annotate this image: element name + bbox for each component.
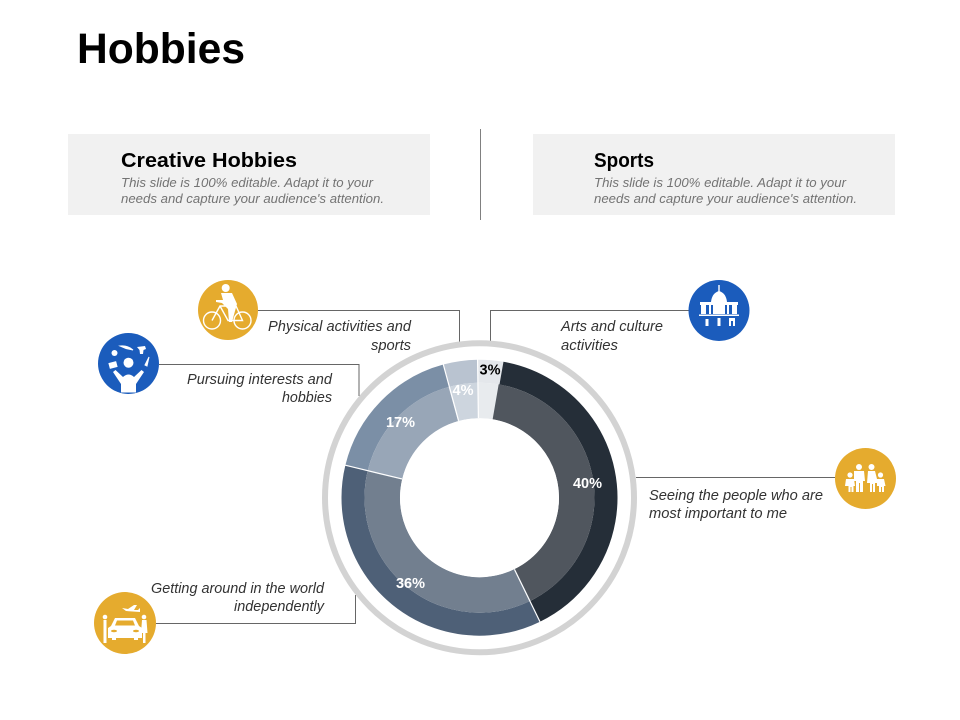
- text: creative hobbies description: needs and capture your audience's attention.: [121, 191, 384, 206]
- label: arts and culture: Arts and culture: [560, 319, 663, 335]
- icon: cyclist: [198, 280, 258, 340]
- label: physical activities: [268, 319, 412, 354]
- panel: sports: [533, 134, 895, 215]
- text: sports description: [594, 175, 857, 206]
- label: pursuing interests: [187, 372, 333, 406]
- value labels: 4%: [453, 383, 474, 399]
- label: seeing people: most important to me: [649, 506, 787, 522]
- value labels: 17%: [386, 415, 415, 431]
- icon: family: [835, 448, 896, 509]
- connector: arts and culture: [490, 310, 689, 344]
- donut chart: [310, 329, 649, 667]
- text: creative hobbies description: [121, 175, 384, 206]
- label: pursuing interests: hobbies: [282, 390, 332, 406]
- icon: car and plane: [94, 592, 156, 654]
- label: getting around: [151, 581, 325, 615]
- icon: juggler: [98, 333, 159, 394]
- label: seeing people: [649, 488, 823, 522]
- segment: 17%: [327, 345, 632, 650]
- inner hole: [400, 418, 559, 577]
- panel: creative hobbies: [68, 134, 430, 215]
- label: physical activities: Physical activities and: [268, 319, 412, 335]
- connector: getting around: [156, 595, 356, 624]
- segment: 3%: [351, 369, 608, 626]
- label: arts and culture: [560, 319, 663, 354]
- label: physical activities: sports: [371, 338, 411, 354]
- connector: pursuing interests: [159, 364, 359, 396]
- label: getting around: independently: [234, 599, 325, 615]
- heading: sports: Sports: [594, 150, 654, 172]
- segment: 36%: [310, 329, 649, 667]
- connector: seeing people: [636, 476, 835, 478]
- value labels: 40%: [573, 476, 602, 492]
- connector: physical activities: [258, 310, 460, 344]
- outer ring: [325, 343, 634, 652]
- label: arts and culture: activities: [561, 338, 618, 354]
- title: Hobbies: [77, 26, 245, 73]
- value labels: 3%: [480, 362, 501, 378]
- text: sports description: This slide is 100% editable. Adapt it to your: [594, 175, 847, 190]
- icon: capitol building: [688, 280, 750, 341]
- label: pursuing interests: Pursuing interests and: [187, 372, 333, 388]
- label: getting around: Getting around in the world: [151, 581, 325, 597]
- segment: 40%: [333, 351, 626, 644]
- text: creative hobbies description: This slide is 100% editable. Adapt it to your: [121, 175, 374, 190]
- value labels: [386, 362, 602, 592]
- text: sports description: needs and capture your audience's attention.: [594, 191, 857, 206]
- heading: creative hobbies: Creative Hobbies: [121, 150, 297, 172]
- value labels: 36%: [396, 576, 425, 592]
- segment: 4%: [324, 342, 635, 653]
- label: seeing people: Seeing the people who are: [649, 488, 823, 504]
